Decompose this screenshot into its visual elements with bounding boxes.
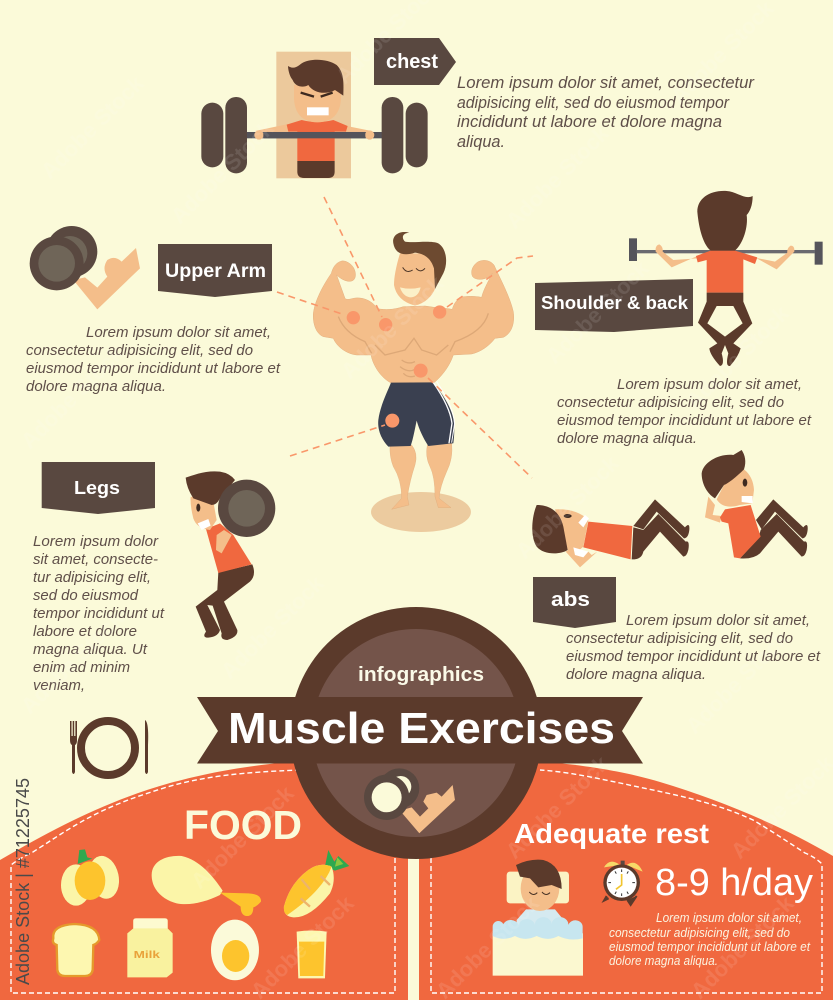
head <box>394 253 436 306</box>
icon: plate with fork and knife <box>70 720 148 775</box>
watermark: repeated stock marks: Adobe Stock <box>16 605 129 719</box>
icon: bread <box>53 924 99 976</box>
dashed border: rest <box>431 770 822 993</box>
label: shoulder and back: Shoulder & back <box>541 293 689 313</box>
text: rest description: consectetur adipisicing elit, sed do <box>609 926 790 940</box>
icon: carrot <box>284 850 349 917</box>
label: chest: chest <box>386 51 438 73</box>
text: abs description: eiusmod tempor incididunt ut labore et <box>566 648 821 665</box>
text: legs description: labore et dolore <box>33 623 137 640</box>
text: upper arm description: dolore magna aliqua. <box>26 378 166 395</box>
text: shoulder and back description: Lorem ipsum dolor sit amet, <box>617 376 802 393</box>
text: abs description: dolore magna aliqua. <box>566 666 706 683</box>
text: legs description: magna aliqua. Ut <box>33 641 148 658</box>
text: chest description: incididunt ut labore et dolore magna <box>457 113 722 131</box>
text: abs description: Lorem ipsum dolor sit amet, <box>626 612 810 629</box>
icon: sleeping person <box>493 860 583 976</box>
title ribbon <box>197 697 643 764</box>
text: shoulder and back description <box>557 376 812 447</box>
label: abs: abs <box>551 589 590 611</box>
text: upper arm description: consectetur adipisicing elit, sed do <box>26 342 253 359</box>
text: legs description: sed do eiusmod <box>33 587 139 604</box>
text: shoulder and back description: dolore magna aliqua. <box>557 430 697 447</box>
figure: muscular man <box>313 232 514 532</box>
badge: title emblem <box>197 607 643 859</box>
text: abs description: consectetur adipisicing elit, sed do <box>566 630 793 647</box>
divider strip <box>408 850 419 1000</box>
shorts <box>378 382 454 447</box>
text: legs description <box>33 533 165 694</box>
panel: upper arm <box>26 226 281 395</box>
icon: glass of juice <box>297 930 327 978</box>
icon: arm with dumbbell <box>364 768 455 833</box>
icon: arm lifting dumbbell <box>30 226 140 309</box>
icon: man with barbell behind shoulders <box>629 191 823 366</box>
text: legs description: tur adipisicing elit, <box>33 569 151 586</box>
watermark: repeated stock marks: Adobe Stock <box>681 300 794 414</box>
text: chest description: aliqua. <box>457 133 505 151</box>
watermark: repeated stock marks: Adobe Stock <box>216 570 329 684</box>
text: upper arm description: Lorem ipsum dolor sit amet, <box>86 324 271 341</box>
text: rest description: dolore magna aliqua. <box>609 954 718 968</box>
watermark: repeated stock marks: Adobe Stock <box>16 340 129 454</box>
text: shoulder and back description: consectetur adipisicing elit, sed do <box>557 394 784 411</box>
watermark: repeated stock marks: Adobe Stock <box>511 450 624 564</box>
target muscle dots <box>347 305 446 428</box>
watermark: repeated stock marks: Adobe Stock <box>501 120 614 234</box>
text: rest description: Lorem ipsum dolor sit amet, <box>656 911 802 925</box>
subtitle: infographics <box>358 664 484 686</box>
icon: alarm clock <box>603 861 643 905</box>
text: hours of sleep: 8-9 h/day <box>655 862 813 904</box>
watermark: repeated stock marks: Adobe Stock <box>541 255 654 369</box>
label: shoulder and back <box>535 279 693 332</box>
text: upper arm description <box>26 324 281 395</box>
label: upper arm <box>158 244 272 297</box>
panel: adequate rest <box>431 770 822 993</box>
text: rest description <box>609 911 810 968</box>
icon: chicken leg <box>152 856 261 916</box>
text: shoulder and back description: eiusmod tempor incididunt ut labore et <box>557 412 812 429</box>
text: legs description: tempor incididunt ut <box>33 605 165 622</box>
dashed connector lines <box>277 197 533 478</box>
panel: abs <box>532 450 821 683</box>
icon: bell pepper <box>61 849 123 906</box>
panel: legs <box>33 462 275 694</box>
icon: man lying down before sit-up <box>532 499 689 567</box>
icon: milk carton: Milk <box>134 950 160 961</box>
title: Muscle Exercises <box>228 704 615 753</box>
watermark: source credit: Adobe Stock | #71225745 <box>13 778 33 985</box>
panel: shoulder and back <box>535 191 823 447</box>
text: legs description: sit amet, consecte- <box>33 551 158 568</box>
label: upper arm: Upper Arm <box>165 261 266 282</box>
icon: man squatting with weight plate <box>186 471 275 640</box>
legs <box>390 443 452 509</box>
panel: chest <box>201 38 755 178</box>
watermark: repeated stock marks: Adobe Stock <box>681 625 794 739</box>
text: rest description: eiusmod tempor incididunt ut labore et <box>609 940 810 954</box>
label: abs <box>533 577 616 628</box>
text: abs description <box>566 612 821 683</box>
icon: man bench pressing barbell <box>201 52 428 178</box>
icon: milk carton <box>127 918 173 977</box>
panel: orange base <box>0 757 833 1000</box>
heading: food: FOOD <box>184 802 302 848</box>
text: chest description <box>457 74 755 151</box>
icon: boiled egg <box>211 920 259 980</box>
text: legs description: veniam, <box>33 677 85 694</box>
watermark: repeated stock marks: Adobe Stock <box>186 780 299 894</box>
text: upper arm description: eiusmod tempor incididunt ut labore et <box>26 360 281 377</box>
text: chest description: adipisicing elit, sed do eiusmod tempor <box>457 94 730 112</box>
food icons <box>53 849 349 980</box>
watermark: repeated stock marks: Adobe Stock <box>36 70 149 184</box>
panel: food <box>11 770 395 993</box>
torso and flexed arms <box>313 260 514 383</box>
text: chest description: Lorem ipsum dolor sit amet, consectetur <box>457 74 755 92</box>
heading: adequate rest: Adequate rest <box>514 818 709 849</box>
watermark: repeated stock marks: Adobe Stock <box>501 750 614 864</box>
icon: man sitting up <box>702 450 808 558</box>
floor shadow <box>371 492 471 532</box>
muscle definition lines <box>338 313 488 377</box>
label: legs <box>42 462 155 514</box>
text: legs description: enim ad minim <box>33 659 130 676</box>
text: legs description: Lorem ipsum dolor <box>33 533 159 550</box>
dashed border: food <box>11 770 395 993</box>
watermark: repeated stock marks: Adobe Stock <box>336 270 449 384</box>
label: chest <box>374 38 456 85</box>
watermark: repeated stock marks: Adobe Stock <box>166 115 279 229</box>
label: legs: Legs <box>74 478 120 498</box>
